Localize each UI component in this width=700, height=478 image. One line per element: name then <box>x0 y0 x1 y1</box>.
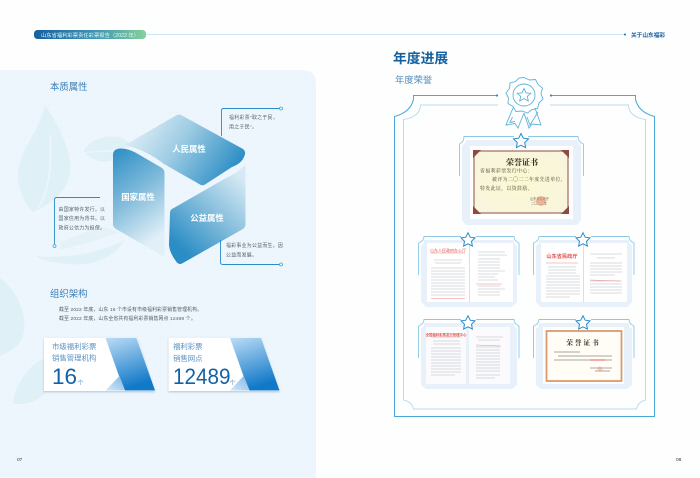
stat card: municipal institutions: 16 <box>52 364 77 389</box>
segment: people attribute <box>125 114 245 185</box>
page number left: 07 <box>17 457 23 463</box>
stat card: sales outlets <box>168 338 280 391</box>
certificate: honor certificate 4: 荣誉证书 <box>566 337 601 347</box>
stat card: municipal institutions: 市级福利彩票 <box>52 342 96 351</box>
icon: star <box>461 233 475 246</box>
icon: star <box>461 316 475 329</box>
panel: left page background <box>0 70 316 478</box>
callout: people <box>222 107 282 136</box>
text block: organization summary: 截至 2022 年底，山东全省共有福利彩票销售网点 12489 个。 <box>59 315 196 322</box>
callout: public welfare: 福彩事业为公益而生。因 <box>226 242 283 249</box>
certificate: honor certificate 4 <box>534 316 634 389</box>
segment: national attribute <box>113 148 164 257</box>
callout: national: 国家信用为背书。以 <box>58 215 105 222</box>
segment: public welfare attribute: 公益属性 <box>190 213 224 223</box>
stat card: sales outlets: 个 <box>230 380 236 387</box>
frame outline <box>460 136 584 176</box>
certificate: top provincial award: 荣誉证书 <box>506 157 539 168</box>
decorative leaves <box>0 105 135 404</box>
stat card: municipal institutions: 销售管理机构 <box>52 354 96 362</box>
heading: organization: 组织架构 <box>50 288 88 299</box>
callout: national: 政府公信力为担保。 <box>58 224 105 232</box>
icon: star <box>576 316 590 329</box>
icon: star <box>514 134 528 148</box>
stat card: municipal institutions: 个 <box>78 380 84 387</box>
segment: public welfare attribute <box>169 164 246 264</box>
heading: annual progress: 年度进展 <box>393 50 448 66</box>
diagram: three attributes hexagon <box>113 114 246 264</box>
document: honor document 3: 全国福利彩票发行管理中心 <box>426 332 467 337</box>
document: honor document 3 <box>418 316 519 389</box>
segment: people attribute: 人民属性 <box>172 144 206 154</box>
callout: public welfare <box>220 240 283 266</box>
honors frame <box>394 94 654 417</box>
callout: public welfare: 公益而发展。 <box>226 252 257 258</box>
callout: national <box>53 198 105 248</box>
header: report title pill <box>34 30 146 39</box>
header: section name: 关于山东福彩 <box>631 31 665 39</box>
stat card: sales outlets: 福利彩票 <box>173 342 203 351</box>
icon: star <box>576 233 590 246</box>
stat card: sales outlets: 12489 <box>173 364 230 389</box>
certificate: top provincial award: 特发此证，以资鼓励。 <box>480 185 533 192</box>
text block: organization summary: 截至 2022 年底，山东 16 个市设有市级福利彩票销售管理机构。 <box>59 306 202 313</box>
document: honor document 1: 山东人民政府办公厅 <box>430 247 466 253</box>
callout: people: 福利彩票“取之于民， <box>229 114 278 121</box>
document: honor document 2 <box>534 233 634 307</box>
stat card: municipal institutions <box>44 338 155 391</box>
stat card: sales outlets: 销售网点 <box>173 354 203 363</box>
certificate: top provincial award: 山东省民政厅 <box>530 196 550 201</box>
certificate: top provincial award: 被评为二〇二二年度先进单位， <box>492 176 566 183</box>
segment: national attribute: 国家属性 <box>121 192 155 202</box>
certificate: top provincial award: 二〇二三年 <box>531 200 548 206</box>
certificate: top provincial award <box>460 134 584 225</box>
icon: award badge <box>506 78 543 128</box>
header: report title pill: 山东省福利彩票责任彩票报告（2022 年） <box>41 31 139 39</box>
callout: national: 由国家特许发行。以 <box>58 206 105 213</box>
callout: people: 用之于民”。 <box>229 124 257 130</box>
subheading: annual honors: 年度荣誉 <box>395 74 432 85</box>
certificate: top provincial award: 省福利彩票发行中心： <box>480 168 533 174</box>
header rule <box>146 34 626 36</box>
heading: essential attributes: 本质属性 <box>50 81 88 92</box>
document: honor document 2: 山东省民政厅 <box>546 252 578 260</box>
certificate image <box>474 151 568 213</box>
document: honor document 1 <box>418 233 519 307</box>
page number right: 08 <box>676 457 682 463</box>
